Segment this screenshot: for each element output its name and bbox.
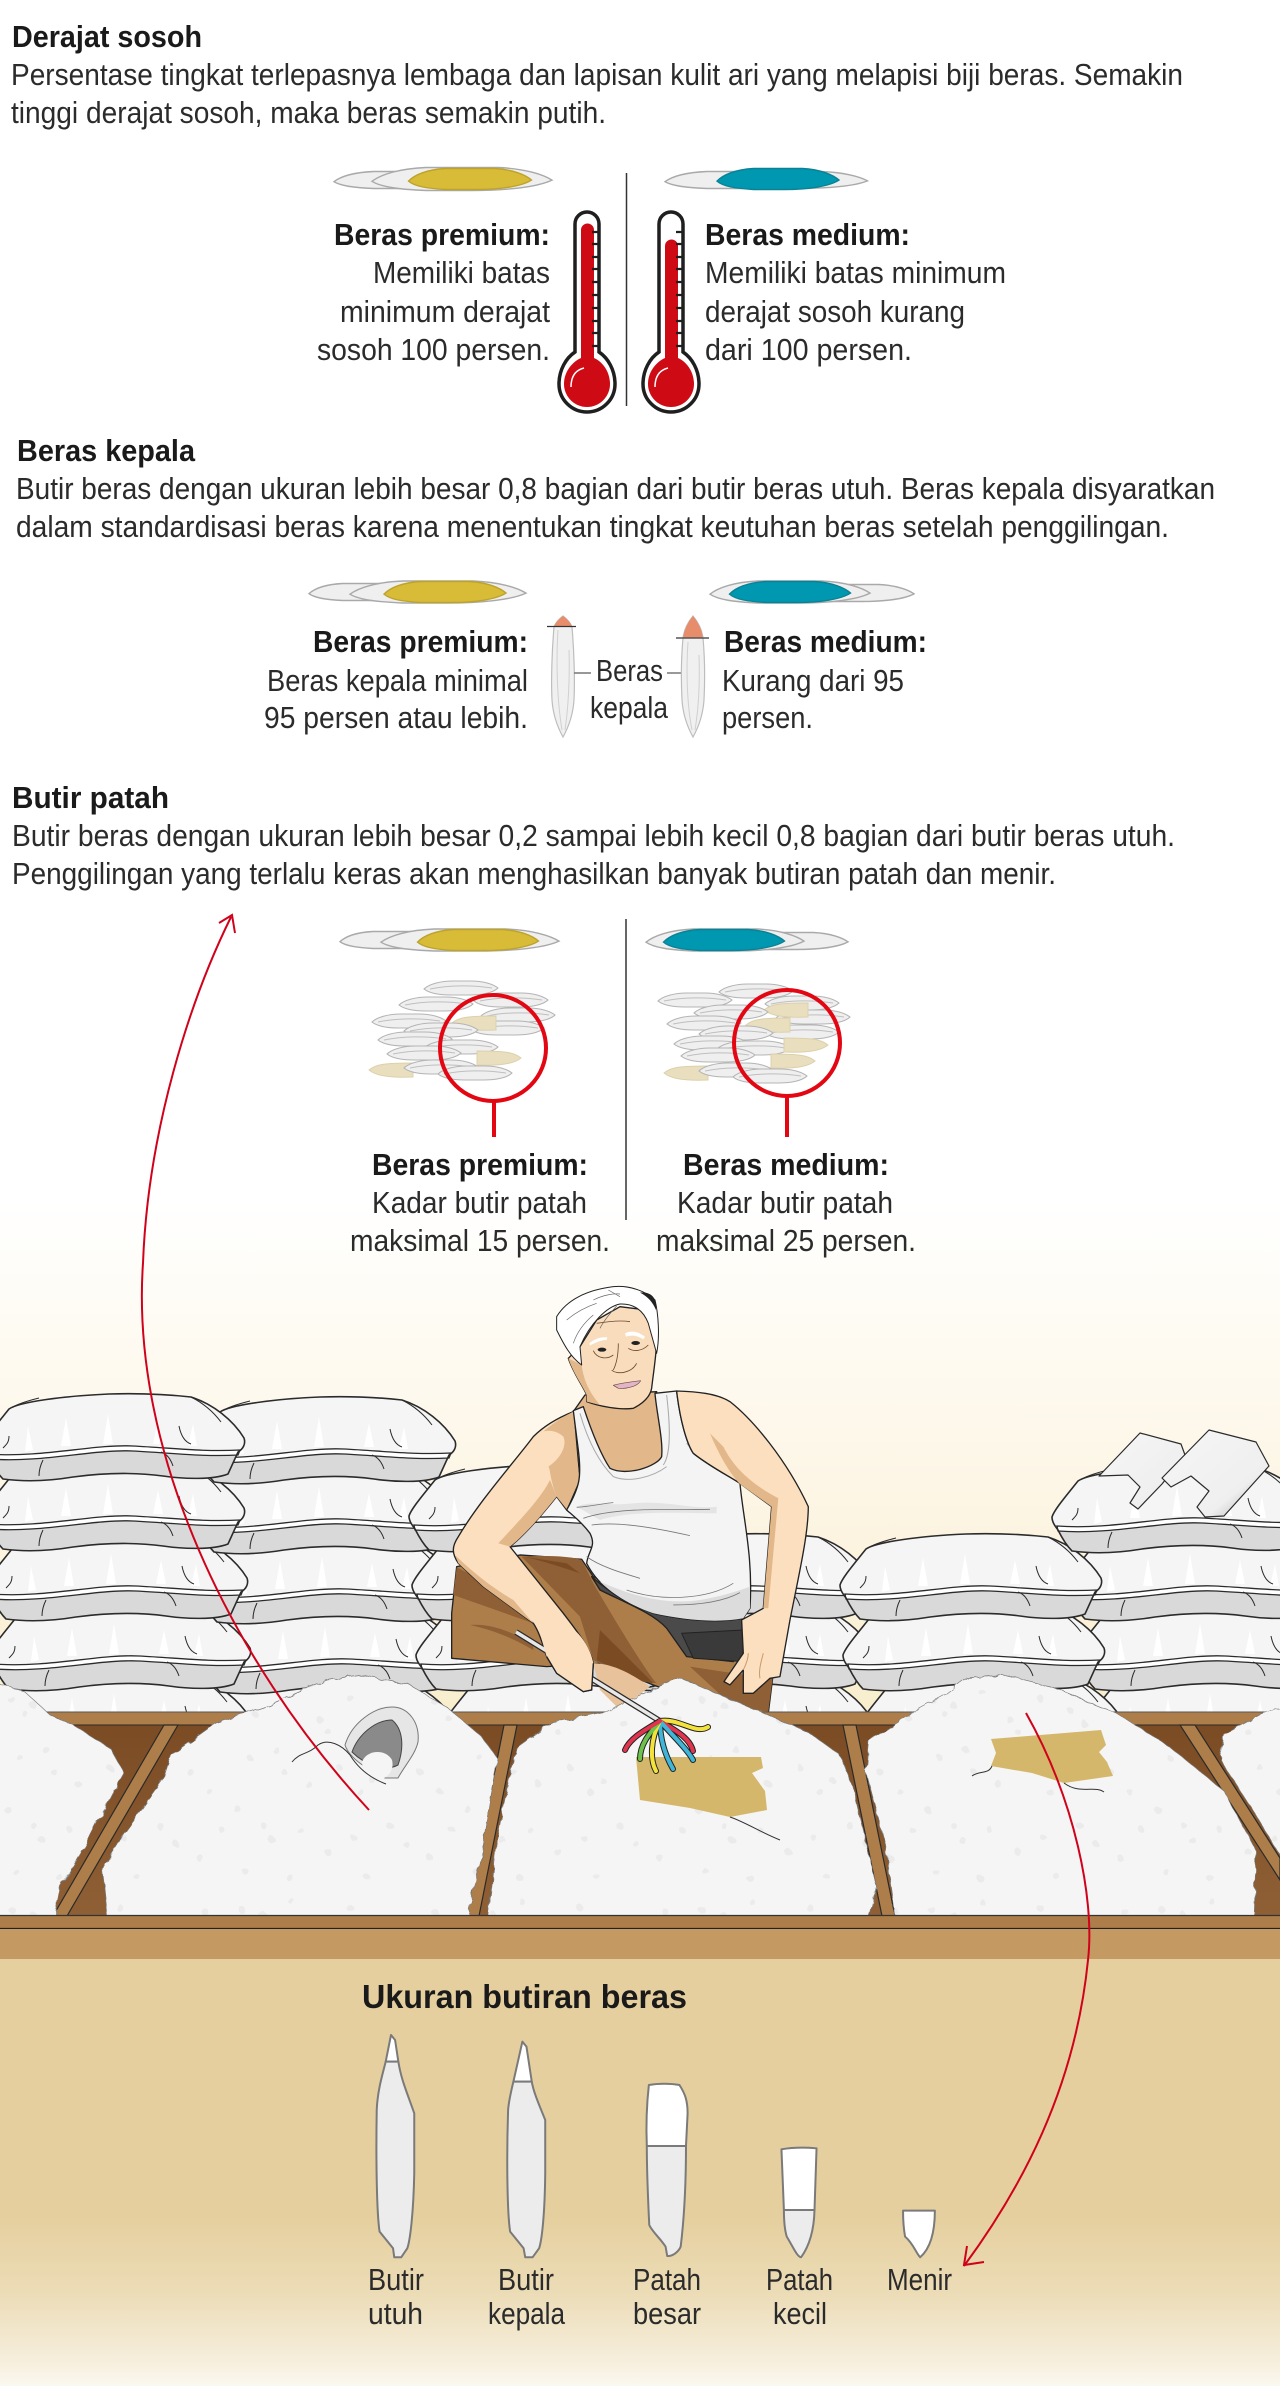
text: premium derajat sosoh: Beras premium:: [334, 217, 550, 252]
shelf base boards: [0, 1915, 1280, 1959]
label: Butir kepala: kepala: [488, 2296, 566, 2331]
left arm: [453, 1412, 593, 1692]
worker left hand: [540, 1627, 593, 1692]
icon: thermometer premium: [559, 212, 615, 412]
text: medium derajat sosoh: Beras medium:: [705, 217, 910, 252]
icon: long grain premium: [547, 616, 576, 737]
text: Beras kepala center label: [574, 653, 682, 725]
text: medium beras kepala: [722, 624, 927, 735]
label: Patah besar: besar: [633, 2296, 701, 2331]
icon: thermometer medium: [643, 212, 699, 412]
label: Butir utuh: [368, 2262, 424, 2331]
right arm: [677, 1391, 808, 1693]
text: medium butir patah: Beras medium:: [683, 1147, 889, 1182]
text: premium butir patah: [350, 1147, 610, 1258]
heading: Butir patah: Butir patah: [12, 780, 169, 815]
worker figure: [452, 1286, 808, 1713]
label: Patah kecil: [766, 2262, 833, 2331]
text: medium butir patah: [656, 1147, 916, 1258]
belt and pouch: [592, 1577, 745, 1662]
text: medium beras kepala: persen.: [722, 700, 813, 735]
arrow: red curve from pile to Menir: [964, 1713, 1089, 2266]
text: premium beras kepala: 95 persen atau lebih.: [264, 700, 528, 735]
label: Butir kepala: [488, 2262, 566, 2331]
icon: plastic sacks on top of stack: [1099, 1430, 1269, 1517]
divider: section 3: [625, 919, 627, 1220]
label: Patah besar: Patah: [633, 2262, 701, 2297]
icon: premium rice grains, section 1: [334, 168, 552, 190]
chart: grain sizes: [376, 2035, 935, 2257]
icon: medium rice grains, section 1: [665, 168, 868, 190]
text: medium derajat sosoh: Memiliki batas minimum: [705, 255, 1006, 290]
grain: patah kecil: [781, 2148, 817, 2257]
text: Butir patah description: Butir beras dengan ukuran lebih besar 0,2 sampai lebih kecil 0,8 bagian dari butir beras utuh.: [12, 818, 1175, 853]
magnifier circle premium: [440, 995, 546, 1137]
icon: colourful broom head: [625, 1721, 708, 1771]
label: Butir kepala: Butir: [498, 2262, 554, 2297]
label: Menir: Menir: [887, 2262, 952, 2297]
grain cluster medium with broken grains: [658, 984, 850, 1083]
text: premium beras kepala: Beras kepala minimal: [267, 663, 528, 698]
text: Beras kepala center label: Beras: [596, 653, 663, 688]
text: Derajat sosoh description: tinggi derajat sosoh, maka beras semakin putih.: [11, 95, 606, 130]
text: premium derajat sosoh: Memiliki batas: [373, 255, 550, 290]
icon: scoop in rice pile: [292, 1707, 418, 1784]
shelf timber behind rice: [0, 1712, 1280, 1916]
text: premium beras kepala: Beras premium:: [313, 624, 528, 659]
icon: medium rice grains, section 2: [710, 581, 914, 603]
text: medium beras kepala: Kurang dari 95: [722, 663, 904, 698]
heading: Beras kepala: Beras kepala: [17, 433, 196, 468]
text: premium butir patah: Beras premium:: [372, 1147, 588, 1182]
divider: section 1: [626, 173, 628, 406]
text: Beras kepala description: [16, 471, 1215, 544]
grain: patah besar: [647, 2084, 688, 2256]
icon: medium rice grains, section 3: [646, 929, 848, 951]
patch: burlap on pile right: [972, 1730, 1113, 1792]
icon: premium rice grains, section 2: [309, 581, 526, 603]
text: medium derajat sosoh: [705, 217, 1006, 367]
text: medium derajat sosoh: derajat sosoh kurang: [705, 294, 965, 329]
text: medium butir patah: Kadar butir patah: [677, 1185, 893, 1220]
text: premium derajat sosoh: minimum derajat: [340, 294, 550, 329]
text: medium beras kepala: Beras medium:: [724, 624, 927, 659]
text: premium butir patah: Kadar butir patah: [372, 1185, 587, 1220]
pants: [452, 1555, 773, 1713]
tank top: [567, 1391, 751, 1621]
text: Derajat sosoh description: [11, 57, 1183, 130]
text: Derajat sosoh description: Persentase tingkat terlepasnya lembaga dan lapisan kulit ari yang melapisi biji beras. Semakin: [11, 57, 1183, 92]
heading: Derajat sosoh: Derajat sosoh: [12, 19, 202, 54]
icon: long grain medium: [676, 616, 709, 737]
text: Butir patah description: Penggilingan yang terlalu keras akan menghasilkan banyak butiran patah dan menir.: [12, 856, 1056, 891]
grain cluster premium with broken grains: [369, 981, 555, 1080]
head: [557, 1286, 658, 1409]
label: Patah kecil: kecil: [773, 2296, 827, 2331]
text: Butir patah description: [12, 818, 1175, 891]
chest: [567, 1392, 667, 1513]
text: medium butir patah: maksimal 25 persen.: [656, 1223, 916, 1258]
background wall gradient: [0, 1200, 1280, 1720]
text: premium derajat sosoh: [317, 217, 550, 367]
label: Butir utuh: Butir: [368, 2262, 424, 2297]
grain: butir kepala: [507, 2042, 545, 2257]
heading: Ukuran butiran beras: Ukuran butiran beras: [362, 1978, 687, 2015]
text: Beras kepala description: dalam standardisasi beras karena menentukan tingkat keutuhan beras setelah penggilingan.: [16, 509, 1169, 544]
text: premium derajat sosoh: sosoh 100 persen.: [317, 332, 550, 367]
floor panel: [0, 1959, 1280, 2386]
rice piles: [0, 1675, 1280, 1925]
text: premium beras kepala: [264, 624, 528, 735]
stick held by worker: [516, 1632, 660, 1721]
rice sacks stack, left: [0, 1394, 462, 1764]
grain: menir: [903, 2211, 935, 2257]
label: Patah kecil: Patah: [766, 2262, 833, 2297]
icon: premium rice grains, section 3: [340, 929, 559, 951]
rice sacks stack, right: [840, 1466, 1280, 1761]
arrow: red curve from pile to Butir patah text: [142, 915, 369, 1810]
patch: burlap on pile centre: [636, 1757, 780, 1840]
label: Patah besar: [633, 2262, 701, 2331]
text: medium derajat sosoh: dari 100 persen.: [705, 332, 912, 367]
grain: butir utuh: [376, 2035, 414, 2257]
label: Butir utuh: utuh: [368, 2296, 423, 2331]
text: premium butir patah: maksimal 15 persen.: [350, 1223, 610, 1258]
text: Beras kepala center label: kepala: [590, 690, 669, 725]
magnifier circle medium: [734, 990, 840, 1137]
rice sacks stack, behind man: [409, 1465, 872, 1761]
